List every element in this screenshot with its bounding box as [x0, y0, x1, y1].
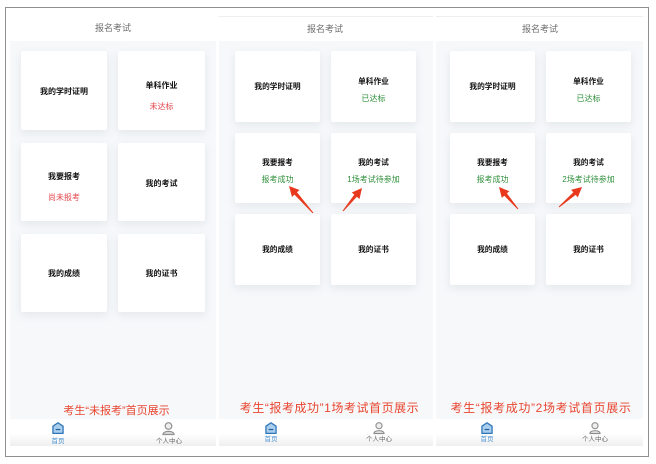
card: my exams: 我的考试 [358, 158, 389, 167]
card: study certificate [450, 51, 535, 122]
card: register: 我要报考 [477, 158, 508, 167]
top rule [219, 16, 433, 17]
panel background [436, 41, 643, 419]
card: my exams [546, 133, 631, 203]
caption: 考生“未报考”首页展示 [63, 405, 170, 417]
card: single-subject homework [546, 51, 631, 122]
card: study certificate: 我的学时证明 [40, 87, 88, 96]
panel: registered, one exam [219, 16, 433, 446]
card: register: 我要报考 [262, 158, 293, 167]
card: my exams: 我的考试 [146, 179, 178, 188]
card: study certificate: 我的学时证明 [469, 82, 516, 91]
card: my scores: 我的成绩 [48, 269, 80, 278]
card: register [21, 143, 107, 221]
top rule [436, 16, 643, 17]
label: personal center: 个人中心 [156, 438, 182, 445]
panel background [10, 41, 216, 419]
card: register [450, 133, 535, 203]
label: home: 首页 [52, 438, 64, 445]
heading: 报名考试 [522, 24, 558, 34]
icon: home [481, 422, 493, 434]
card: study certificate: 我的学时证明 [254, 82, 301, 91]
card: my certificates: 我的证书 [358, 245, 389, 254]
card: single-subject homework [118, 51, 205, 130]
tab bar [219, 419, 433, 446]
card: my scores [450, 214, 535, 285]
card: register: 我要报考 [48, 172, 80, 181]
tab bar [10, 419, 216, 446]
card: register [235, 133, 320, 203]
icon: home [52, 422, 64, 434]
icon: home [265, 422, 277, 434]
card: study certificate [21, 51, 107, 130]
card: register: 报考成功 [476, 175, 508, 184]
label: personal center: 个人中心 [582, 436, 608, 443]
card: my certificates: 我的证书 [573, 245, 604, 254]
label: home: 首页 [480, 436, 494, 443]
card: single-subject homework: 未达标 [150, 102, 174, 111]
card: my certificates [331, 214, 416, 285]
card: single-subject homework: 单科作业 [358, 77, 389, 86]
caption: 考生“报考成功”1场考试首页展示 [240, 401, 419, 415]
card: single-subject homework: 单科作业 [146, 81, 178, 90]
heading: 报名考试 [307, 24, 343, 34]
icon: person [589, 422, 601, 434]
card: my exams [331, 133, 416, 203]
card: single-subject homework: 已达标 [362, 94, 386, 103]
caption: 考生“报考成功”2场考试首页展示 [450, 401, 632, 415]
label: home: 首页 [264, 436, 278, 443]
card: my scores: 我的成绩 [262, 245, 293, 254]
card: my scores: 我的成绩 [477, 245, 508, 254]
card: my exams: 我的考试 [573, 158, 604, 167]
card: study certificate [235, 51, 320, 122]
card: my certificates: 我的证书 [146, 269, 178, 278]
panel background [219, 41, 433, 419]
card: single-subject homework: 单科作业 [573, 77, 604, 86]
card: my exams: 1场考试待参加 [347, 175, 400, 184]
card: my certificates [546, 214, 631, 285]
icon: person [162, 422, 175, 436]
card: my exams [118, 143, 205, 221]
card: my exams: 2场考试待参加 [562, 175, 615, 184]
card: single-subject homework [331, 51, 416, 122]
card: register: 报考成功 [262, 175, 294, 184]
card: register: 尚未报考 [48, 193, 80, 202]
panel: not registered [10, 22, 216, 446]
card: my scores [21, 234, 107, 312]
label: personal center: 个人中心 [366, 436, 392, 443]
card: my certificates [118, 234, 205, 312]
icon: person [373, 422, 385, 434]
tab bar [436, 419, 643, 446]
heading: 报名考试 [95, 22, 131, 32]
card: my scores [235, 214, 320, 285]
card: single-subject homework: 已达标 [576, 94, 600, 103]
